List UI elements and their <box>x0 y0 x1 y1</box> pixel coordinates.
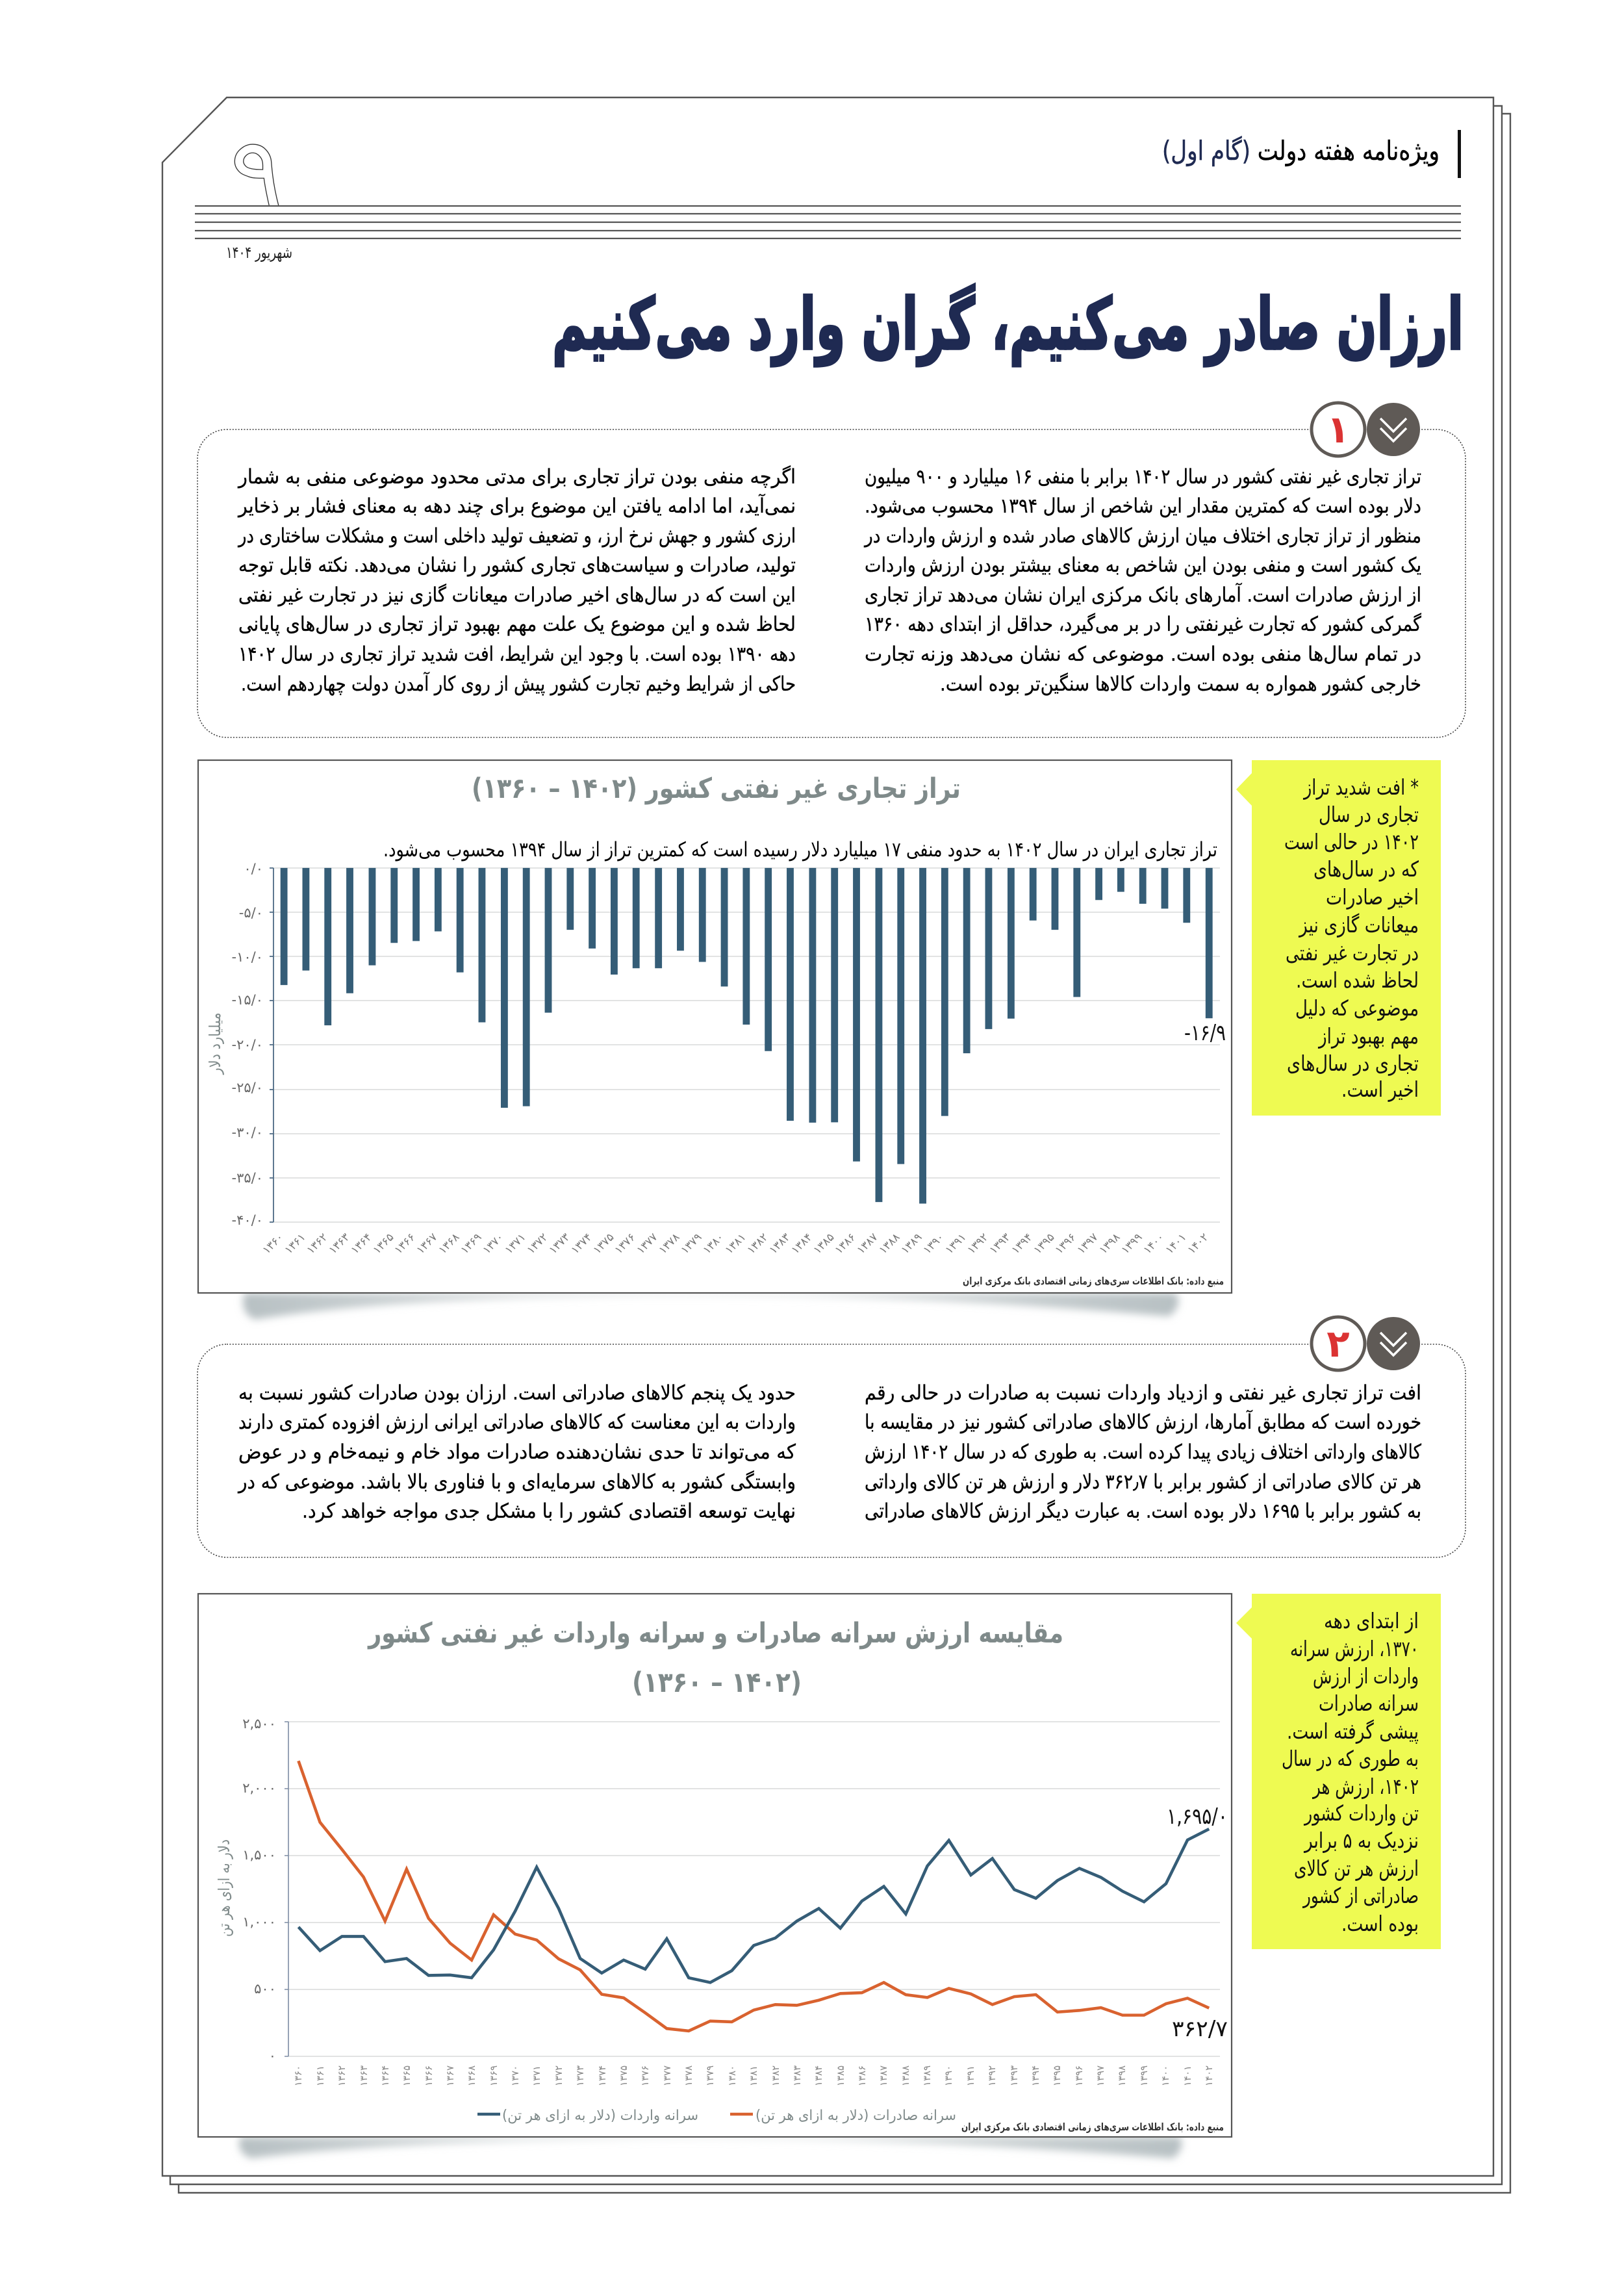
x axis labels: ۱۳۷۳ <box>574 2065 586 2086</box>
x axis labels: ۱۳۸۶ <box>856 2065 868 2086</box>
x axis labels: ۱۳۹۰ <box>943 2065 954 2086</box>
x axis labels: ۱۴۰۱ <box>1182 2065 1193 2086</box>
grid and axis <box>270 868 1220 1222</box>
x axis labels: ۱۳۹۵ <box>1051 2065 1063 2086</box>
text column left <box>237 1381 796 1523</box>
text column right: یک کشور است و منفی بودن این شاخص به معنای بیشتر بودن ارزش واردات <box>865 554 1421 577</box>
callout: yellow note 1: در تجارت غیر نفتی <box>1286 940 1419 965</box>
x axis labels: ۱۳۹۷ <box>1074 1231 1100 1257</box>
text column right: از ارزش صادرات است. آمارهای بانک مرکزی ایران نشان می‌دهد تراز تجاری <box>865 582 1421 607</box>
y axis title: دلار به ازای هر تن <box>215 1839 233 1937</box>
callout: yellow note 2: ارزش هر تن کالای <box>1294 1856 1419 1881</box>
header bar <box>1458 130 1461 178</box>
callout: yellow note 1: که در سال‌های <box>1313 856 1419 882</box>
y axis labels: -۲۵/۰ <box>231 1080 263 1095</box>
x axis labels: ۱۴۰۰ <box>1160 2065 1171 2086</box>
source note: منبع داده: بانک اطلاعات سری‌های زمانی اقتصادی بانک مرکزی ایران <box>961 2121 1224 2133</box>
x axis labels: ۱۳۶۱ <box>314 2065 326 2086</box>
x axis labels: ۱۳۶۶ <box>423 2065 435 2086</box>
x axis labels: ۱۳۹۷ <box>1095 2065 1106 2086</box>
x axis labels: ۱۳۸۰ <box>726 2065 738 2086</box>
text column left: نمی‌آید، اما ادامه یافتن این موضوع برای چند دهه به معنای فشار بر ذخایر <box>237 493 796 518</box>
x axis labels: ۱۳۹۹ <box>1138 2065 1150 2086</box>
x axis labels <box>292 2065 1215 2086</box>
x axis labels: ۱۳۷۴ <box>596 2065 608 2086</box>
text column left: لحاظ شده و این موضوع یک علت مهم بهبود تراز تجاری در سال‌های پایانی <box>238 613 796 636</box>
x axis labels: ۱۴۰۲ <box>1203 2065 1215 2086</box>
text column right: کالاهای وارداتی اختلاف زیادی پیدا کرده است. به طوری که در سال ۱۴۰۲ ارزش <box>865 1440 1421 1464</box>
text column left <box>237 465 796 696</box>
y axis labels: -۵/۰ <box>239 905 263 921</box>
value label: -۱۶/۹ <box>1184 1020 1226 1046</box>
x axis labels: ۱۴۰۲ <box>1185 1231 1211 1257</box>
x axis labels: ۱۳۹۴ <box>1030 2065 1041 2086</box>
x axis labels: ۱۳۹۱ <box>965 2065 976 2086</box>
chart subtitle: تراز تجاری ایران در سال ۱۴۰۲ به حدود منفی ۱۷ میلیارد دلار رسیده است که کمترین تراز از سال ۱۳۹۴ محسوب می‌شود. <box>383 838 1217 862</box>
x axis labels: ۱۳۶۳ <box>358 2065 370 2086</box>
x axis labels: ۱۳۷۹ <box>678 1231 704 1257</box>
callout: yellow note 1: ۱۴۰۲ در حالی است <box>1284 829 1419 854</box>
callout: yellow note 1: اخیر صادرات <box>1326 884 1419 910</box>
x axis labels: ۱۳۷۳ <box>546 1231 572 1257</box>
source note: منبع داده: بانک اطلاعات سری‌های زمانی اقتصادی بانک مرکزی ایران <box>963 1275 1224 1287</box>
x axis labels: ۱۳۷۰ <box>509 2065 521 2086</box>
x axis labels: ۱۳۹۲ <box>986 2065 998 2086</box>
x axis labels: ۱۳۸۹ <box>921 2065 933 2086</box>
panel: bar chart trade balance <box>198 760 1232 1320</box>
page number: ۹ <box>230 116 283 230</box>
x axis labels: ۱۳۸۲ <box>744 1231 770 1257</box>
chart title: تراز تجاری غیر نفتی کشور (۱۴۰۲ – ۱۳۶۰) <box>472 773 961 805</box>
x axis labels: ۱۳۶۴ <box>348 1231 374 1257</box>
x axis labels: ۱۳۷۲ <box>553 2065 565 2086</box>
y axis labels: -۲۰/۰ <box>231 1037 263 1053</box>
x axis labels: ۱۳۸۲ <box>770 2065 781 2086</box>
x axis labels: ۱۳۸۶ <box>832 1231 858 1257</box>
x axis labels: ۱۳۹۸ <box>1116 2065 1128 2086</box>
callout: yellow note 2: تن واردات کشور <box>1303 1800 1419 1826</box>
callout: yellow note 1: میعانات گازی نیز <box>1298 912 1419 938</box>
chart title: (۱۴۰۲ – ۱۳۶۰) <box>632 1667 802 1699</box>
y axis labels: ۲,۵۰۰ <box>242 1716 276 1731</box>
callout: yellow note 1 <box>1236 760 1441 1116</box>
x axis labels: ۱۳۹۸ <box>1097 1231 1123 1257</box>
x axis labels: ۱۳۷۶ <box>639 2065 651 2086</box>
x axis labels: ۱۳۸۷ <box>878 2065 889 2086</box>
page header <box>195 116 1461 262</box>
text column left: اگرچه منفی بودن تراز تجاری برای مدتی محدود موضوعی منفی به شمار <box>237 465 796 489</box>
x axis labels: ۱۳۶۷ <box>414 1231 440 1257</box>
import line <box>298 1829 1209 1982</box>
x axis labels <box>260 1231 1211 1257</box>
x axis labels: ۱۳۸۹ <box>898 1231 924 1257</box>
x axis labels: ۱۳۸۵ <box>835 2065 846 2086</box>
y axis labels: -۳۵/۰ <box>231 1170 263 1186</box>
chart title <box>367 1617 1063 1699</box>
panel: text box 1 <box>197 403 1465 737</box>
x axis labels: ۱۳۷۹ <box>704 2065 716 2086</box>
callout: yellow note 1: مهم بهبود تراز <box>1317 1023 1419 1049</box>
x axis labels: ۱۳۷۵ <box>590 1231 616 1257</box>
text column left: تولید، صادرات و سیاست‌های تجاری کشور را نشان می‌دهد. نکته قابل توجه <box>238 554 796 577</box>
y axis labels: ۱,۵۰۰ <box>242 1847 276 1863</box>
legend: سرانه صادرات (دلار به ازای هر تن) <box>755 2108 956 2124</box>
stacked page frame <box>162 97 1510 2193</box>
x axis labels: ۱۳۸۷ <box>854 1231 880 1257</box>
y axis labels: ۵۰۰ <box>254 1981 276 1997</box>
text column right: خارجی کشور همواره به سمت واردات کالاها سنگین‌تر بوده است. <box>940 672 1421 696</box>
y axis labels <box>242 1716 276 2063</box>
text column right: در تمام سال‌ها منفی بوده است. موضوعی که نشان می‌دهد وزنه تجارت <box>865 643 1421 666</box>
x axis labels: ۱۳۷۲ <box>524 1231 550 1257</box>
callout: yellow note 2: واردات از ارزش <box>1313 1663 1419 1689</box>
x axis labels: ۱۳۹۵ <box>1031 1231 1057 1257</box>
x axis labels: ۱۳۶۴ <box>379 2065 391 2086</box>
x axis labels: ۱۳۶۹ <box>488 2065 500 2086</box>
callout: yellow note 2: ۱۴۰۲، ارزش هر <box>1312 1774 1419 1799</box>
x axis labels: ۱۳۶۰ <box>260 1231 286 1257</box>
y axis labels: -۳۰/۰ <box>231 1125 263 1140</box>
text column right: منظور از تراز تجاری اختلاف میان ارزش کالاهای صادر شده و ارزش واردات در <box>863 524 1421 548</box>
x axis labels: ۱۳۶۶ <box>392 1231 418 1257</box>
callout: yellow note 1: تجاری در سال <box>1319 802 1419 827</box>
x axis labels: ۱۳۹۲ <box>965 1231 991 1257</box>
chart title: مقایسه ارزش سرانه صادرات و سرانه واردات غیر نفتی کشور <box>367 1617 1063 1650</box>
x axis labels: ۱۳۷۱ <box>502 1231 528 1257</box>
text column left: دهه ۱۳۹۰ بوده است. با وجود این شرایط، افت شدید تراز تجاری در سال ۱۴۰۲ <box>238 643 796 666</box>
bars <box>284 868 1209 1203</box>
legend <box>477 2108 956 2124</box>
x axis labels: ۱۳۹۱ <box>943 1231 969 1257</box>
callout: yellow note 1: * افت شدید تراز <box>1302 774 1419 800</box>
callout: yellow note 1: لحاظ شده است. <box>1296 967 1419 993</box>
callout: yellow note 2: سرانه صادرات <box>1319 1691 1419 1716</box>
callout: yellow note 2: ۱۳۷۰، ارزش سرانه <box>1290 1636 1419 1661</box>
text column left: حدود یک پنجم کالاهای صادراتی است. ارزان بودن صادرات کشور نسبت به <box>238 1381 796 1405</box>
x axis labels: ۱۳۹۰ <box>920 1231 946 1257</box>
y axis labels <box>231 861 263 1228</box>
y axis labels: ۰ <box>269 2048 276 2063</box>
y axis labels: -۱۵/۰ <box>231 992 263 1008</box>
x axis labels: ۱۳۷۸ <box>656 1231 682 1257</box>
callout: yellow note 2: پیشی گرفته است. <box>1287 1718 1419 1744</box>
x axis labels: ۱۴۰۱ <box>1163 1231 1189 1257</box>
callout: yellow note 2 <box>1236 1594 1441 1949</box>
x axis labels: ۱۳۸۳ <box>791 2065 803 2086</box>
x axis labels: ۱۳۷۴ <box>568 1231 594 1257</box>
text column left: نهایت توسعه اقتصادی کشور را با مشکل جدی مواجه خواهد کرد. <box>302 1500 796 1523</box>
badge 1 <box>1312 403 1420 456</box>
text column right: افت تراز تجاری غیر نفتی و ازدیاد واردات نسبت به صادرات در حالی رقم <box>865 1381 1421 1405</box>
infographic page <box>161 96 1511 2193</box>
grid and axis <box>285 1722 1220 2056</box>
text column right: هر تن کالای صادراتی از کشور برابر با ۳۶۲٫۷ دلار و ارزش هر تن کالای وارداتی <box>865 1470 1421 1494</box>
header rules <box>195 206 1461 238</box>
x axis labels: ۱۴۰۰ <box>1141 1231 1167 1257</box>
x axis labels: ۱۳۶۲ <box>336 2065 348 2086</box>
y axis labels: ۲,۰۰۰ <box>242 1780 276 1796</box>
x axis labels: ۱۳۶۸ <box>436 1231 462 1257</box>
x axis labels: ۱۳۷۸ <box>683 2065 694 2086</box>
callout: yellow note 2: صادراتی از کشور <box>1302 1883 1419 1908</box>
x axis labels: ۱۳۶۵ <box>370 1231 396 1257</box>
text column left: این است که در سال‌های اخیر صادرات میعانات گازی نیز در تجارت غیر نفتی <box>238 583 796 607</box>
x axis labels: ۱۳۷۷ <box>634 1231 660 1257</box>
value label exports: ۳۶۲/۷ <box>1172 2016 1228 2042</box>
legend: سرانه واردات (دلار به ازای هر تن) <box>502 2108 698 2124</box>
x axis labels: ۱۳۸۱ <box>722 1231 748 1257</box>
x axis labels: ۱۳۸۵ <box>811 1231 837 1257</box>
text column right: دلار بوده است که کمترین مقدار این شاخص از سال ۱۳۹۴ محسوب می‌شود. <box>865 494 1421 518</box>
text column left: حاکی از شرایط وخیم تجارت کشور پیش از روی کار آمدن دولت چهاردهم است. <box>241 671 796 696</box>
x axis labels: ۱۳۷۱ <box>531 2065 542 2086</box>
x axis labels: ۱۳۷۵ <box>618 2065 629 2086</box>
x axis labels: ۱۳۶۸ <box>466 2065 477 2086</box>
y axis title: میلیارد دلار <box>206 1012 224 1075</box>
text column right: خورده است که مطابق آمارها، ارزش کالاهای صادراتی کشور نیز در مقایسه با <box>865 1409 1421 1434</box>
callout: yellow note 1: اخیر است. <box>1341 1077 1419 1102</box>
callout: yellow note 1: موضوعی که دلیل <box>1295 995 1419 1021</box>
panel: line chart export import value per ton <box>198 1594 1232 2158</box>
text column left: واردات به این معناست که کالاهای صادراتی ایرانی ارزش افزوده کمتری دارند <box>238 1411 796 1434</box>
x axis labels: ۱۳۸۸ <box>900 2065 911 2086</box>
text column right <box>865 1381 1421 1523</box>
badge 1: ۱ <box>1326 407 1350 452</box>
export line <box>298 1761 1209 2031</box>
x axis labels: ۱۳۷۶ <box>612 1231 638 1257</box>
text column left: وابستگی کشور به کالاهای سرمایه‌ای و با فناوری بالا باشد. موضوعی که در <box>237 1470 796 1494</box>
panel: text box 2 <box>197 1317 1465 1557</box>
callout: yellow note 1: تجاری در سال‌های <box>1287 1051 1419 1076</box>
y axis labels: ۱,۰۰۰ <box>242 1914 276 1930</box>
x axis labels: ۱۳۹۹ <box>1119 1231 1145 1257</box>
callout: yellow note 2: بوده است. <box>1341 1911 1419 1936</box>
text column right: تراز تجاری غیر نفتی کشور در سال ۱۴۰۲ برابر با منفی ۱۶ میلیارد و ۹۰۰ میلیون <box>865 465 1421 489</box>
y axis labels: -۴۰/۰ <box>231 1212 263 1228</box>
x axis labels: ۱۳۶۷ <box>444 2065 456 2086</box>
y axis labels: ۰/۰ <box>244 861 263 876</box>
text column left: ارزی کشور و جهش نرخ ارز، و تضعیف تولید داخلی است و مشکلات ساختاری در <box>237 524 796 548</box>
badge 2 <box>1312 1317 1420 1370</box>
callout: yellow note 2: به طوری که در سال <box>1282 1746 1419 1771</box>
callout: yellow note 2: نزدیک به ۵ برابر <box>1303 1828 1419 1853</box>
x axis labels: ۱۳۷۰ <box>480 1231 506 1257</box>
x axis labels: ۱۳۹۳ <box>987 1231 1013 1257</box>
x axis labels: ۱۳۶۰ <box>292 2065 304 2086</box>
x axis labels: ۱۳۸۴ <box>813 2065 824 2086</box>
date: شهریور ۱۴۰۴ <box>226 243 292 262</box>
lines <box>298 1761 1209 2031</box>
text column right: به کشور برابر با ۱۶۹۵ دلار بوده است. به عبارت دیگر ارزش کالاهای صادراتی <box>865 1500 1421 1523</box>
section label: ویژه‌نامه هفته دولت (گام اول) <box>1162 135 1440 166</box>
text column right <box>863 465 1421 696</box>
text column left: که می‌تواند تا حدی نشان‌دهنده صادرات مواد خام و نیمه‌خام و در عوض <box>238 1440 796 1464</box>
x axis labels: ۱۳۸۳ <box>767 1231 793 1257</box>
x axis labels: ۱۳۶۱ <box>282 1231 308 1257</box>
x axis labels: ۱۳۶۵ <box>401 2065 412 2086</box>
x axis labels: ۱۳۸۴ <box>789 1231 815 1257</box>
x axis labels: ۱۳۸۱ <box>748 2065 759 2086</box>
x axis labels: ۱۳۹۳ <box>1008 2065 1020 2086</box>
x axis labels: ۱۳۶۳ <box>326 1231 352 1257</box>
text column right: گمرکی کشور که تجارت غیرنفتی را در بر می‌گیرد، حداقل از ابتدای دهه ۱۳۶۰ <box>865 613 1421 636</box>
x axis labels: ۱۳۹۶ <box>1073 2065 1085 2086</box>
x axis labels: ۱۳۸۰ <box>700 1231 726 1257</box>
x axis labels: ۱۳۹۴ <box>1009 1231 1035 1257</box>
value label imports: ۱,۶۹۵/۰ <box>1167 1804 1228 1830</box>
y axis labels: -۱۰/۰ <box>231 949 263 965</box>
callout: yellow note 2: از ابتدای دهه <box>1324 1608 1419 1633</box>
x axis labels: ۱۳۶۹ <box>458 1231 484 1257</box>
x axis labels: ۱۳۸۸ <box>876 1231 902 1257</box>
x axis labels: ۱۳۹۶ <box>1052 1231 1078 1257</box>
badge 2: ۲ <box>1326 1322 1350 1366</box>
x axis labels: ۱۳۶۲ <box>304 1231 330 1257</box>
x axis labels: ۱۳۷۷ <box>661 2065 673 2086</box>
